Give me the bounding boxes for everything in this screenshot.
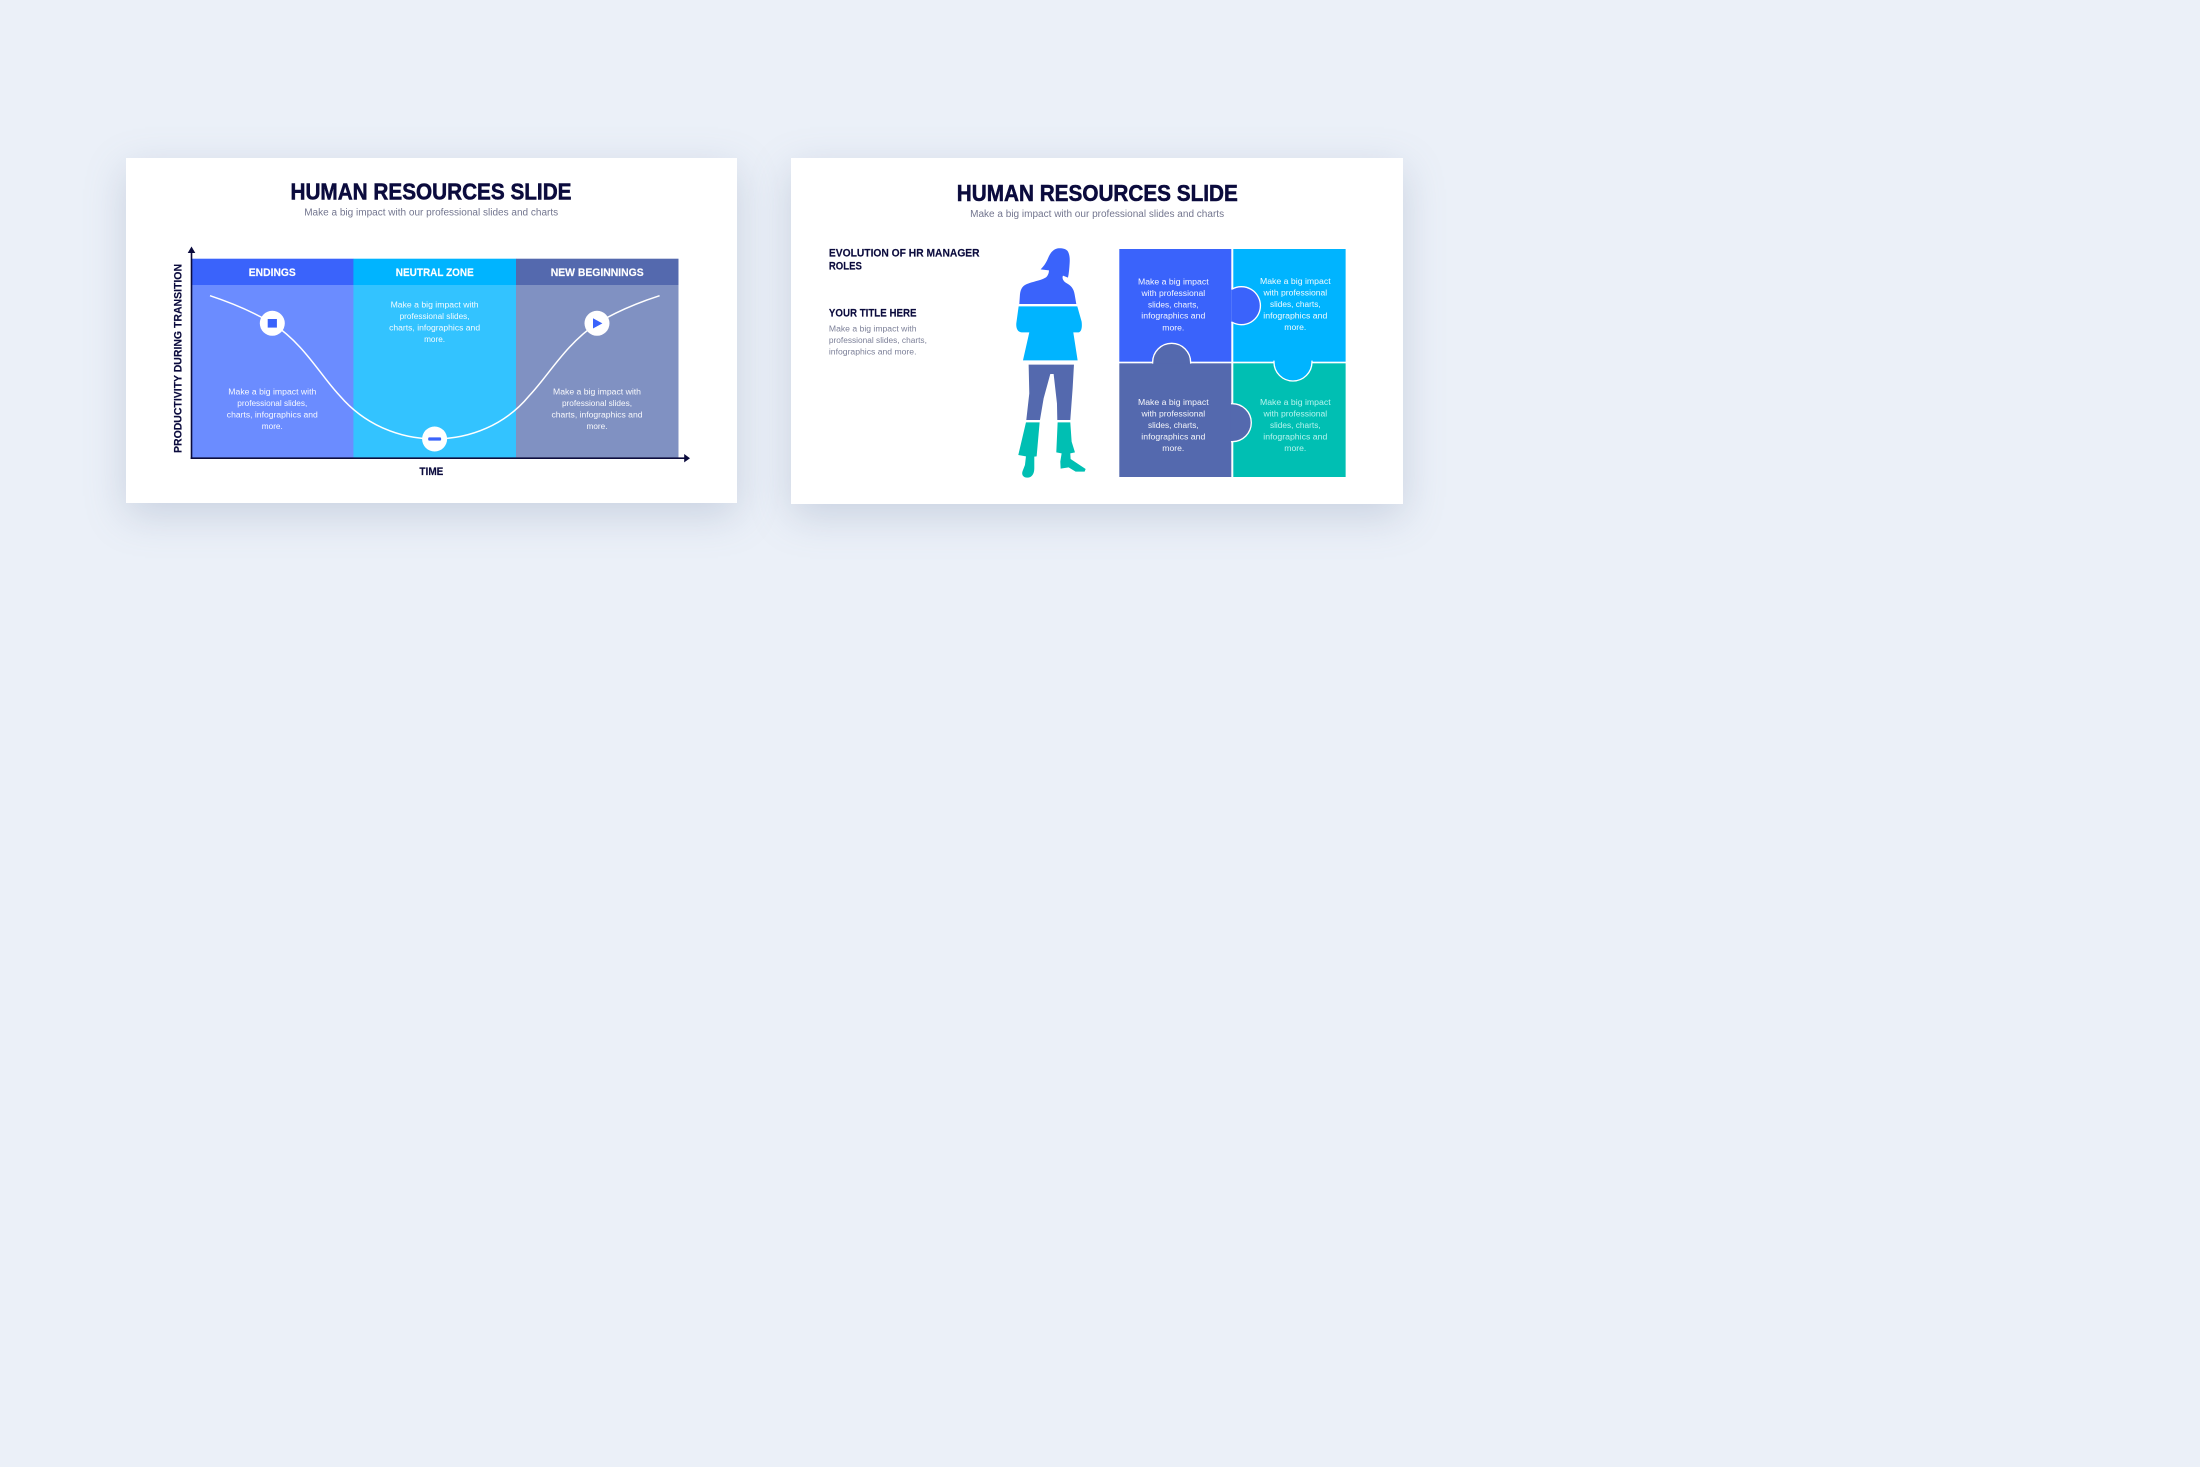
- text: endings: Make a big impact with: [228, 387, 316, 396]
- tab: cyan: [1274, 361, 1312, 381]
- text: blue piece: with professional: [1140, 289, 1205, 298]
- text: slate piece: with professional: [1140, 409, 1205, 418]
- heading: evolution of hr manager roles: EVOLUTION OF HR MANAGER: [829, 248, 979, 260]
- icon: play: [584, 311, 609, 336]
- text: teal piece: with professional: [1262, 409, 1327, 418]
- text: teal piece: [1260, 398, 1331, 453]
- subtitle: Make a big impact with our professional slides and charts: [304, 207, 558, 218]
- text: endings: [227, 387, 318, 431]
- text: new beginnings: more.: [586, 422, 607, 431]
- piece: slate: [1119, 363, 1231, 477]
- text: blue piece: Make a big impact: [1138, 277, 1209, 286]
- y axis label: PRODUCTIVITY DURING TRANSITION: [173, 264, 185, 453]
- silhouette: legs: [1026, 365, 1074, 420]
- text: slate piece: Make a big impact: [1138, 398, 1209, 407]
- silhouette: head and shoulders: [1019, 248, 1076, 304]
- tab: slate right: [1231, 404, 1251, 442]
- text: new beginnings: [551, 387, 642, 431]
- text: neutral zone: more.: [424, 335, 445, 344]
- text: endings: more.: [262, 422, 283, 431]
- panel: slide 2 puzzle and silhouette: [791, 158, 1403, 504]
- text: cyan piece: Make a big impact: [1260, 277, 1331, 286]
- text: endings: professional slides,: [237, 399, 307, 408]
- text: slate piece: infographics and: [1141, 432, 1205, 441]
- tab: slate top: [1152, 343, 1190, 364]
- text: new beginnings: charts, infographics and: [551, 410, 642, 419]
- text: blue piece: infographics and: [1141, 312, 1205, 321]
- text: teal piece: slides, charts,: [1270, 421, 1320, 430]
- silhouette: torso: [1016, 306, 1082, 360]
- chart: transition curve: [173, 246, 690, 478]
- column: new beginnings: NEW BEGINNINGS: [551, 267, 644, 279]
- heading: evolution of hr manager roles: ROLES: [829, 260, 862, 272]
- text: endings: charts, infographics and: [227, 410, 318, 419]
- panel: slide 1 transition curve: [126, 158, 737, 503]
- column: endings: [192, 259, 354, 457]
- tab: blue: [1231, 287, 1260, 325]
- title: HUMAN RESOURCES SLIDE: [291, 178, 571, 204]
- icon: pause minus: [422, 426, 447, 451]
- text: new beginnings: Make a big impact with: [553, 387, 641, 396]
- icon: woman silhouette: [1016, 248, 1085, 478]
- silhouette: boots: [1018, 422, 1085, 478]
- icon: stop: [260, 311, 285, 336]
- text: cyan piece: with professional: [1262, 289, 1327, 298]
- curve: [210, 296, 660, 439]
- text: cyan piece: [1260, 277, 1331, 332]
- text: blue piece: more.: [1162, 323, 1184, 332]
- text: neutral zone: Make a big impact with: [391, 300, 479, 309]
- text: cyan piece: infographics and: [1263, 311, 1327, 320]
- text: slate piece: more.: [1162, 444, 1184, 453]
- text: teal piece: infographics and: [1263, 432, 1327, 441]
- text: blue piece: slides, charts,: [1148, 300, 1198, 309]
- text: slate piece: slides, charts,: [1148, 421, 1198, 430]
- column: new beginnings: [516, 259, 678, 457]
- text block: infographics and more.: [829, 347, 916, 356]
- text: cyan piece: slides, charts,: [1270, 300, 1320, 309]
- heading: your title here: YOUR TITLE HERE: [829, 308, 916, 320]
- heading: evolution of hr manager roles: [829, 248, 979, 272]
- chart: puzzle: [1119, 249, 1345, 477]
- axes: [188, 246, 690, 462]
- text: slate piece: [1138, 398, 1209, 453]
- x axis label: TIME: [419, 466, 443, 478]
- column: endings: ENDINGS: [249, 267, 296, 279]
- column: neutral zone: [353, 259, 516, 457]
- text: neutral zone: [389, 300, 480, 344]
- text block: professional slides, charts,: [829, 336, 927, 345]
- piece: blue: [1119, 249, 1231, 362]
- text: neutral zone: professional slides,: [400, 312, 470, 321]
- text: new beginnings: professional slides,: [562, 399, 632, 408]
- title: HUMAN RESOURCES SLIDE: [956, 180, 1237, 206]
- text: teal piece: Make a big impact: [1260, 398, 1331, 407]
- text: blue piece: [1138, 277, 1209, 332]
- text block: Make a big impact with: [829, 324, 916, 333]
- text: teal piece: more.: [1284, 444, 1306, 453]
- piece: teal: [1233, 363, 1345, 477]
- text: cyan piece: more.: [1284, 323, 1306, 332]
- text block: [829, 324, 927, 356]
- text: neutral zone: charts, infographics and: [389, 323, 480, 332]
- column: neutral zone: NEUTRAL ZONE: [396, 267, 474, 279]
- subtitle: Make a big impact with our professional slides and charts: [970, 209, 1224, 220]
- piece: cyan: [1233, 249, 1345, 362]
